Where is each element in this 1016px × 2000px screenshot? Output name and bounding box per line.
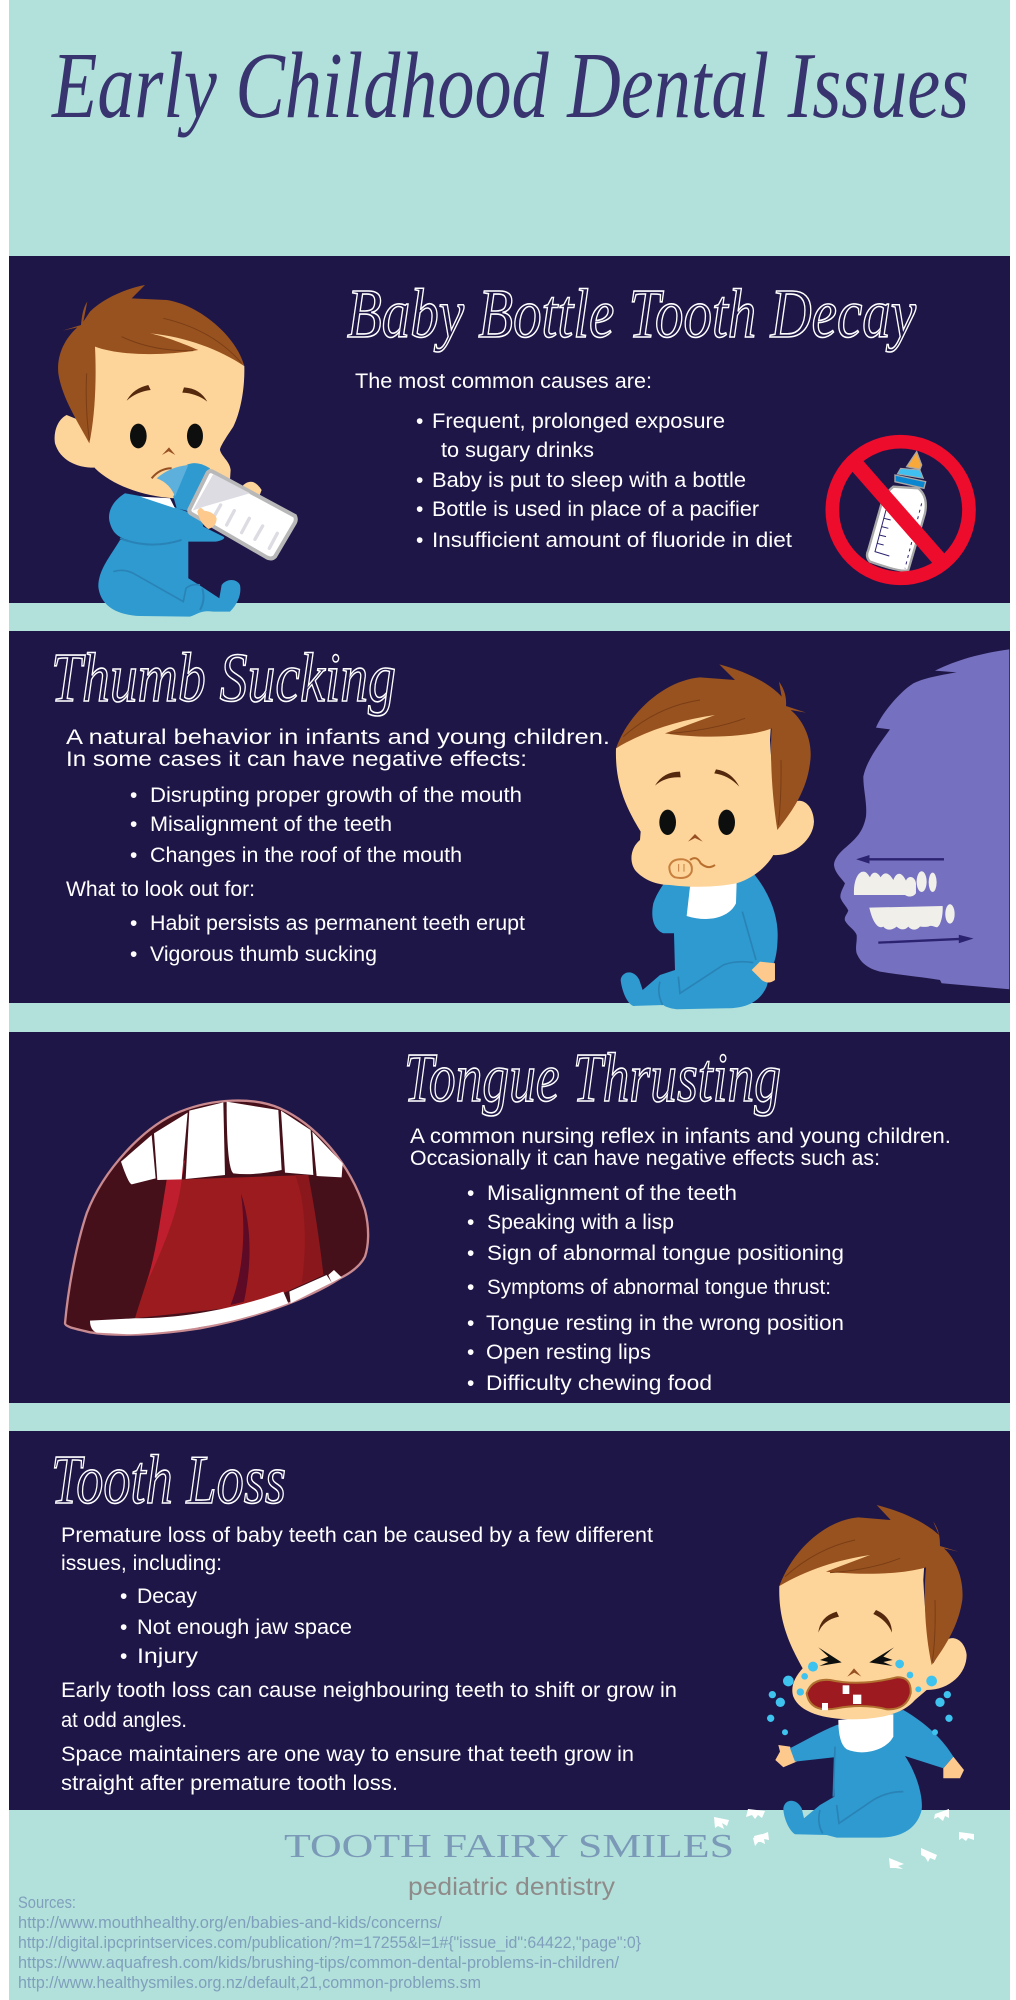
text block: tooth loss causes: Injury [137, 1645, 199, 1668]
text block: tongue thrusting effects: A common nursing reflex in infants and young children. [410, 1125, 951, 1148]
logo: tooth fairy smiles [284, 1828, 734, 1901]
text block: tooth loss causes: • [120, 1645, 127, 1668]
text block: tongue thrusting effects: • [467, 1372, 474, 1395]
illustration: baby drinking from bottle [55, 285, 296, 617]
logo: tooth fairy smiles: TOOTH FAIRY SMILES [284, 1828, 734, 1865]
text block: thumb sucking effects: Misalignment of the teeth [150, 813, 392, 836]
panel: tooth loss [9, 1431, 1010, 1810]
text block: sources: http://www.healthysmiles.org.nz/default,21,common-problems.sm [18, 1973, 481, 1992]
text block: sources [18, 1893, 641, 1992]
text block: thumb sucking effects [66, 726, 610, 966]
text block: sources: http://www.mouthhealthy.org/en/babies-and-kids/concerns/ [18, 1913, 442, 1932]
text block: thumb sucking effects: • [130, 844, 137, 867]
text block: causes of decay: The most common causes are: [355, 370, 652, 393]
text block: tongue thrusting effects: • [467, 1211, 474, 1234]
text block: thumb sucking effects: A natural behavior in infants and young children. [66, 726, 610, 749]
text block: tongue thrusting effects: Misalignment of the teeth [487, 1182, 737, 1205]
text block: thumb sucking effects: Changes in the roof of the mouth [150, 844, 462, 867]
logo: tooth fairy smiles: pediatric dentistry [408, 1873, 616, 1901]
text block: thumb sucking effects: Habit persists as permanent teeth erupt [150, 912, 525, 935]
text block: tongue thrusting effects: • [467, 1312, 474, 1335]
text block: tooth loss causes: Premature loss of baby teeth can be caused by a few different [61, 1524, 653, 1547]
illustration: baby sucking thumb [616, 664, 814, 1009]
text block: tongue thrusting effects: Open resting lips [486, 1341, 651, 1364]
text block: causes of decay [355, 370, 792, 552]
text block: tooth loss causes: Space maintainers are one way to ensure that teeth grow in [61, 1743, 634, 1766]
panel: tongue thrusting [9, 1032, 1010, 1403]
heading: tooth loss: Tooth Loss [51, 1442, 286, 1519]
text block: causes of decay: Baby is put to sleep with a bottle [432, 469, 746, 492]
text block: thumb sucking effects: • [130, 813, 137, 836]
text block: thumb sucking effects: • [130, 943, 137, 966]
text block: tooth loss causes: Early tooth loss can cause neighbouring teeth to shift or grow in [61, 1679, 677, 1702]
heading: thumb sucking: Thumb Sucking [51, 640, 396, 717]
text block: sources: https://www.aquafresh.com/kids/brushing-tips/common-dental-problems-in-children/ [18, 1953, 619, 1972]
text block: thumb sucking effects: In some cases it can have negative effects: [66, 748, 527, 771]
heading: tongue thrusting: Tongue Thrusting [404, 1040, 781, 1117]
text block: causes of decay: • [416, 529, 423, 552]
text block: tongue thrusting effects: • [467, 1182, 474, 1205]
text block: sources: http://digital.ipcprintservices.com/publication/?m=17255&l=1#{"issue_id":64422,"page":0} [18, 1933, 641, 1952]
text block: sources: Sources: [18, 1893, 76, 1912]
text block: tongue thrusting effects: • [467, 1242, 474, 1265]
text block: tooth loss causes: straight after premature tooth loss. [61, 1772, 398, 1795]
text block: tooth loss causes: Not enough jaw space [137, 1616, 352, 1639]
text block: tongue thrusting effects: Tongue resting in the wrong position [486, 1312, 844, 1335]
text block: thumb sucking effects: Disrupting proper growth of the mouth [150, 784, 522, 807]
text block: tongue thrusting effects: Sign of abnormal tongue positioning [487, 1242, 844, 1265]
text block: tongue thrusting effects: Difficulty chewing food [486, 1372, 712, 1395]
text block: tooth loss causes [61, 1524, 677, 1795]
panel: thumb sucking [9, 631, 1010, 1003]
text block: causes of decay: to sugary drinks [441, 439, 594, 462]
text block: tongue thrusting effects: Symptoms of abnormal tongue thrust: [487, 1276, 831, 1299]
text block: tooth loss causes: Decay [137, 1585, 197, 1608]
icon: face silhouette with misaligned teeth [834, 649, 1009, 989]
text block: causes of decay: • [416, 410, 423, 433]
text block: thumb sucking effects: • [130, 912, 137, 935]
text block: tongue thrusting effects [410, 1125, 951, 1395]
text block: tongue thrusting effects: Speaking with a lisp [487, 1211, 674, 1234]
text block: tooth loss causes: issues, including: [61, 1552, 222, 1575]
illustration: crying baby with lost teeth [767, 1505, 967, 1838]
text block: tongue thrusting effects: Occasionally it can have negative effects such as: [410, 1147, 880, 1170]
text block: thumb sucking effects: What to look out for: [66, 878, 255, 901]
text block: tongue thrusting effects: • [467, 1276, 474, 1299]
text block: causes of decay: Insufficient amount of fluoride in diet [432, 529, 792, 552]
text block: causes of decay: Bottle is used in place of a pacifier [432, 498, 759, 521]
panel: baby bottle tooth decay [9, 256, 1010, 603]
text block: tooth loss causes: at odd angles. [61, 1709, 187, 1732]
text block: thumb sucking effects: • [130, 784, 137, 807]
text block: causes of decay: • [416, 469, 423, 492]
text block: tongue thrusting effects: • [467, 1341, 474, 1364]
text block: thumb sucking effects: Vigorous thumb sucking [150, 943, 377, 966]
text block: tooth loss causes: • [120, 1585, 127, 1608]
icon: no bottle sign [832, 442, 969, 578]
text block: tooth loss causes: • [120, 1616, 127, 1639]
text block: causes of decay: Frequent, prolonged exposure [432, 410, 725, 433]
text block: causes of decay: • [416, 498, 423, 521]
icon: scattered teeth [714, 1809, 974, 1869]
icon: open mouth [65, 1101, 368, 1335]
